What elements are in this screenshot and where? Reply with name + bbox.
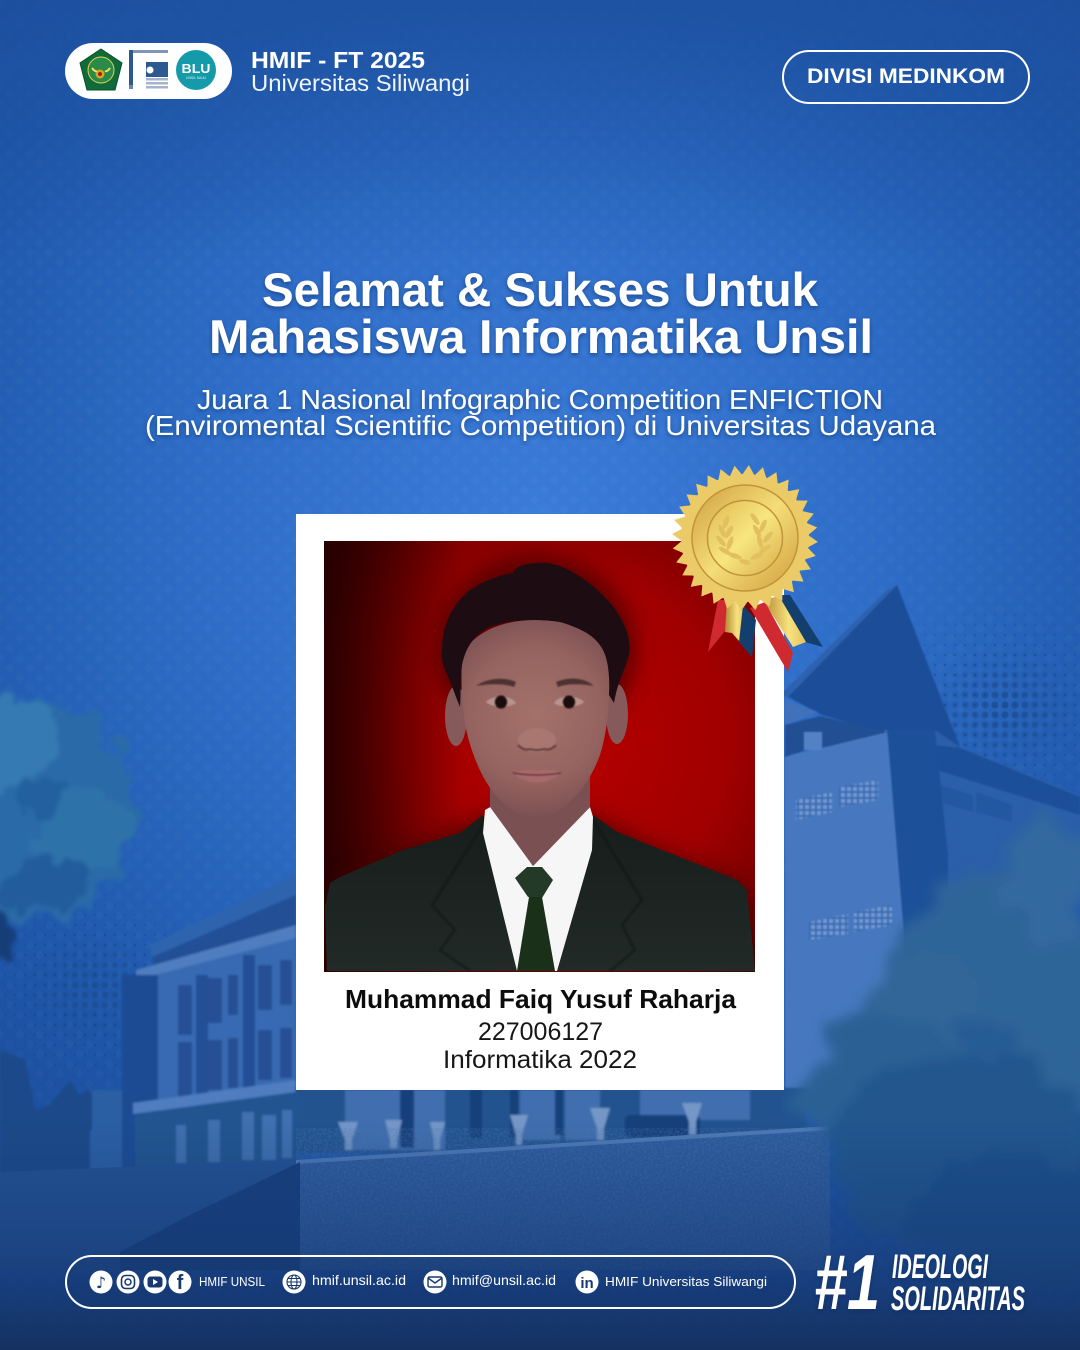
right foreground tree — [805, 820, 1080, 1290]
winner card — [296, 514, 784, 1090]
face — [462, 620, 610, 816]
slogan words — [891, 1248, 1025, 1318]
icon: linkedin: in — [580, 1275, 594, 1292]
shirt — [483, 806, 593, 971]
logo: BLU: BLU — [182, 61, 210, 76]
organisation name: HMIF - FT 2025 — [251, 47, 425, 73]
eyes — [486, 696, 584, 708]
icon: linkedin — [576, 1270, 598, 1294]
jacket — [325, 815, 755, 971]
label: website: hmif.unsil.ac.id — [312, 1272, 406, 1288]
icon: instagram — [116, 1270, 140, 1294]
study programme: Informatika 2022 — [443, 1046, 637, 1074]
title: Selamat & Sukses Untuk — [262, 263, 819, 316]
division badge — [783, 51, 1029, 103]
slogan words: IDEOLOGI — [892, 1248, 989, 1286]
facial features — [476, 679, 594, 782]
left tree — [0, 700, 135, 961]
laurel wreath — [715, 512, 774, 566]
planters — [338, 1103, 702, 1150]
building strip under card — [296, 1088, 806, 1153]
lapels — [432, 820, 642, 971]
logo: university shield — [80, 49, 122, 90]
columns — [196, 955, 255, 1105]
seal rings — [692, 485, 798, 591]
facade — [135, 925, 296, 1115]
tower dark side — [887, 730, 948, 960]
icon: tiktok: ♪ — [96, 1273, 106, 1292]
slogan number: #1 — [814, 1238, 880, 1326]
balcony slab — [136, 925, 296, 980]
nose — [518, 728, 556, 752]
title: Mahasiswa Informatika Unsil — [209, 310, 873, 363]
lips — [513, 770, 561, 782]
left pier — [122, 975, 158, 1175]
footer contact pill — [66, 1256, 795, 1308]
organisation name: Universitas Siliwangi — [251, 70, 470, 96]
bottom dark fade — [0, 1120, 1080, 1350]
medal — [655, 448, 835, 672]
label: HMIF UNSIL: HMIF UNSIL — [199, 1274, 265, 1289]
icon: mail — [424, 1270, 446, 1294]
logo pill — [65, 43, 232, 99]
ground and steps — [0, 1160, 300, 1270]
halftone dots left — [4, 904, 166, 1066]
stone retaining wall — [296, 1126, 830, 1270]
logo: informatics T — [129, 50, 168, 89]
icon: globe — [282, 1270, 306, 1294]
logo: BLU: UNSIL MAJU — [186, 75, 206, 80]
seal burst — [655, 448, 835, 628]
dark halo behind subject — [384, 544, 755, 972]
slogan — [814, 1238, 1025, 1326]
concrete pillar — [90, 1090, 122, 1172]
subtitle — [145, 384, 936, 441]
ribbons — [708, 595, 823, 672]
ears — [445, 684, 628, 746]
right wing — [935, 730, 1080, 905]
student name: Muhammad Faiq Yusuf Raharja — [345, 984, 737, 1014]
roof — [780, 585, 960, 747]
halftone dots right — [924, 614, 1076, 776]
lower slab — [133, 1080, 296, 1114]
student id: 227006127 — [478, 1018, 603, 1046]
neck — [490, 775, 590, 866]
icon: facebook — [168, 1270, 192, 1294]
ground floor — [135, 1092, 296, 1170]
tower stone wall — [785, 716, 906, 1090]
eyebrows — [476, 679, 594, 687]
logo: BLU — [176, 50, 216, 90]
title — [209, 263, 873, 363]
subtitle: (Enviromental Scientific Competition) di Universitas Udayana — [145, 410, 936, 441]
tie — [515, 867, 555, 971]
label: email: hmif@unsil.ac.id — [452, 1272, 556, 1288]
icon: youtube — [144, 1270, 166, 1294]
roof line — [150, 875, 296, 960]
icon: facebook: f — [177, 1272, 184, 1294]
portrait photo — [324, 541, 755, 972]
division badge: DIVISI MEDINKOM — [807, 65, 1005, 88]
organisation name — [251, 47, 470, 96]
left building — [0, 875, 296, 1180]
hair — [442, 563, 630, 707]
icon: tiktok — [90, 1270, 112, 1294]
right tower building — [780, 585, 1080, 1090]
subtitle: Juara 1 Nasional Infographic Competition ENFICTION — [197, 384, 883, 415]
label: linkedin: HMIF Universitas Siliwangi — [605, 1274, 767, 1289]
palm trees — [0, 1050, 92, 1180]
windows — [178, 960, 292, 1097]
